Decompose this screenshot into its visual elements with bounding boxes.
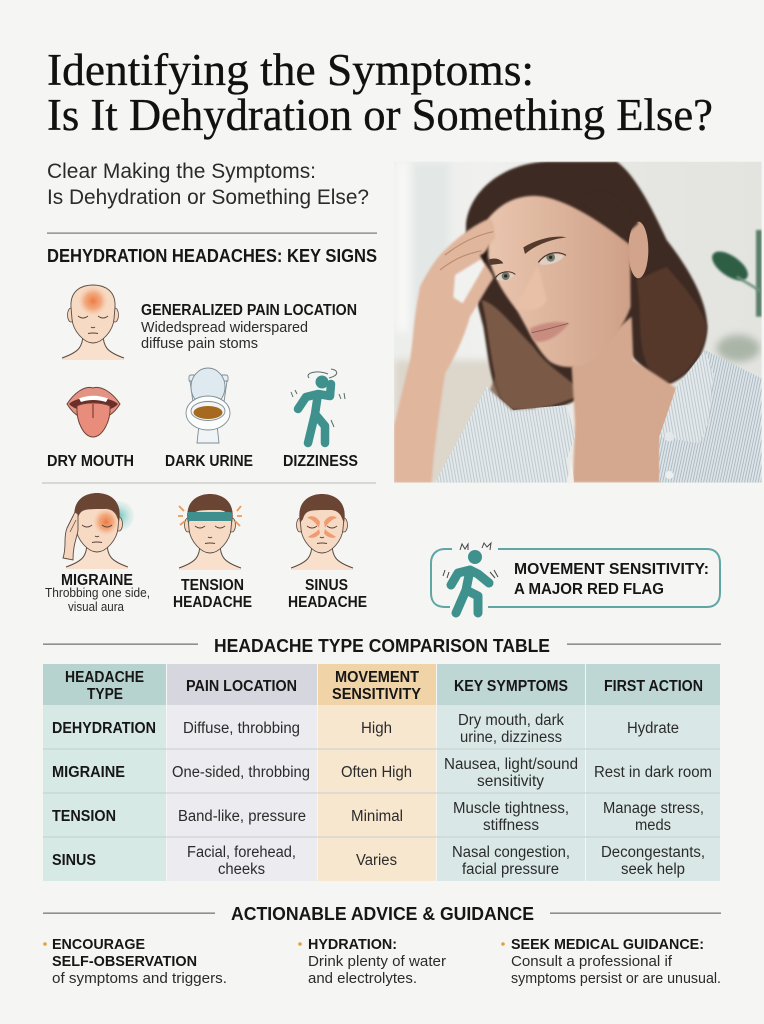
photo: woman with headache <box>394 162 762 484</box>
icon: dizzy figure <box>291 369 345 443</box>
row: migraine: One-sided, throbbing <box>172 764 310 781</box>
advice: seek medical guidance <box>501 936 721 987</box>
row: tension: Muscle tightness, <box>453 800 569 817</box>
heading: key signs: DEHYDRATION HEADACHES: KEY SIGNS <box>47 246 377 266</box>
row: migraine <box>52 756 712 790</box>
row: sinus <box>52 844 705 878</box>
row: sinus: cheeks <box>218 861 265 878</box>
subtitle: Is Dehydration or Something Else? <box>47 186 369 209</box>
icon: head with generalized pain <box>62 285 124 360</box>
label: dark urine: DARK URINE <box>165 453 253 470</box>
row: tension: Manage stress, <box>603 800 704 817</box>
table header row <box>65 669 703 703</box>
icon: tension head <box>178 494 242 570</box>
subtitle: Clear Making the Symptoms: <box>47 160 316 183</box>
row: sinus: Varies <box>356 852 397 869</box>
table header row: MOVEMENT <box>335 669 419 686</box>
table header row: PAIN LOCATION <box>186 678 297 695</box>
advice: hydration: Drink plenty of water <box>308 953 446 970</box>
icon: migraine head <box>63 493 134 569</box>
label: dizziness: DIZZINESS <box>283 453 358 470</box>
row: dehydration <box>52 712 679 746</box>
icon: sinus head <box>291 494 353 570</box>
heading: actionable advice: ACTIONABLE ADVICE & GUIDANCE <box>231 904 534 924</box>
label: tension headache <box>173 577 252 611</box>
label: sinus headache: SINUS <box>305 577 348 594</box>
row: sinus: Decongestants, <box>601 844 705 861</box>
label: tension headache: HEADACHE <box>173 594 252 611</box>
table header row: KEY SYMPTOMS <box>454 678 568 695</box>
label: tension headache: TENSION <box>181 577 244 594</box>
row: migraine: Often High <box>341 764 412 781</box>
photo detail: gap between fingers and thumb <box>453 259 485 303</box>
row: sinus: SINUS <box>52 852 96 869</box>
row: dehydration: Diffuse, throbbing <box>183 720 300 737</box>
label: sinus headache: HEADACHE <box>288 594 367 611</box>
icon: dry mouth <box>67 387 120 437</box>
row: dehydration: High <box>361 720 392 737</box>
icon: figure with movement pain <box>443 543 498 613</box>
row: sinus: facial pressure <box>462 861 559 878</box>
row: sinus: Facial, forehead, <box>187 844 296 861</box>
row: tension: Minimal <box>351 808 403 825</box>
advice: hydration: HYDRATION: <box>308 936 397 953</box>
title: Identifying the Symptoms: <box>47 45 534 95</box>
label: dry mouth: DRY MOUTH <box>47 453 134 470</box>
table header row: TYPE <box>87 686 123 703</box>
row: sinus: Nasal congestion, <box>452 844 570 861</box>
table header row: SENSITIVITY <box>332 686 422 703</box>
advice: seek medical guidance: Consult a professional if <box>511 953 673 970</box>
advice: seek medical guidance: SEEK MEDICAL GUIDANCE: <box>511 936 704 953</box>
row: migraine: Rest in dark room <box>594 764 712 781</box>
row: tension <box>52 800 704 834</box>
text: generalized pain location: Widedspread widerspared <box>141 320 308 336</box>
row: dehydration: DEHYDRATION <box>52 720 156 737</box>
row: dehydration: urine, dizziness <box>460 729 562 746</box>
advice: self-observation <box>43 936 227 987</box>
table header row: HEADACHE <box>65 669 144 686</box>
comparison table <box>43 664 720 881</box>
row: tension: Band-like, pressure <box>178 808 306 825</box>
row: dehydration: Dry mouth, dark <box>458 712 564 729</box>
text: migraine: MIGRAINE <box>61 572 133 589</box>
advice: hydration <box>298 936 446 987</box>
heading: comparison table: HEADACHE TYPE COMPARISON TABLE <box>214 636 550 656</box>
table header row: FIRST ACTION <box>604 678 703 695</box>
title <box>47 45 713 140</box>
row: sinus: seek help <box>621 861 685 878</box>
title: Is It Dehydration or Something Else? <box>47 90 713 140</box>
subtitle <box>47 160 369 209</box>
row: migraine: Nausea, light/sound <box>444 756 578 773</box>
callout: movement sensitivity: MOVEMENT SENSITIVITY: <box>514 561 709 578</box>
row: tension: meds <box>635 817 671 834</box>
icon: toilet with dark urine <box>186 368 230 443</box>
row: migraine: sensitivity <box>477 773 544 790</box>
text: migraine <box>45 572 150 614</box>
text: migraine: Throbbing one side, <box>45 586 150 600</box>
callout: movement sensitivity <box>431 543 720 613</box>
row: tension: stiffness <box>483 817 539 834</box>
advice: seek medical guidance: symptoms persist or are unusual. <box>511 970 721 987</box>
advice: self-observation: SELF-OBSERVATION <box>52 953 197 970</box>
text: migraine: visual aura <box>68 600 124 614</box>
advice: self-observation: ENCOURAGE <box>52 936 145 953</box>
advice: hydration: and electrolytes. <box>308 970 417 987</box>
row: tension: TENSION <box>52 808 116 825</box>
row: migraine: MIGRAINE <box>52 764 125 781</box>
text: generalized pain location <box>141 302 357 352</box>
label: sinus headache <box>288 577 367 611</box>
text: generalized pain location: GENERALIZED PAIN LOCATION <box>141 302 357 319</box>
callout: movement sensitivity: A MAJOR RED FLAG <box>514 581 664 598</box>
advice: self-observation: of symptoms and triggers. <box>52 970 227 987</box>
text: generalized pain location: diffuse pain stoms <box>141 336 258 352</box>
row: dehydration: Hydrate <box>627 720 679 737</box>
